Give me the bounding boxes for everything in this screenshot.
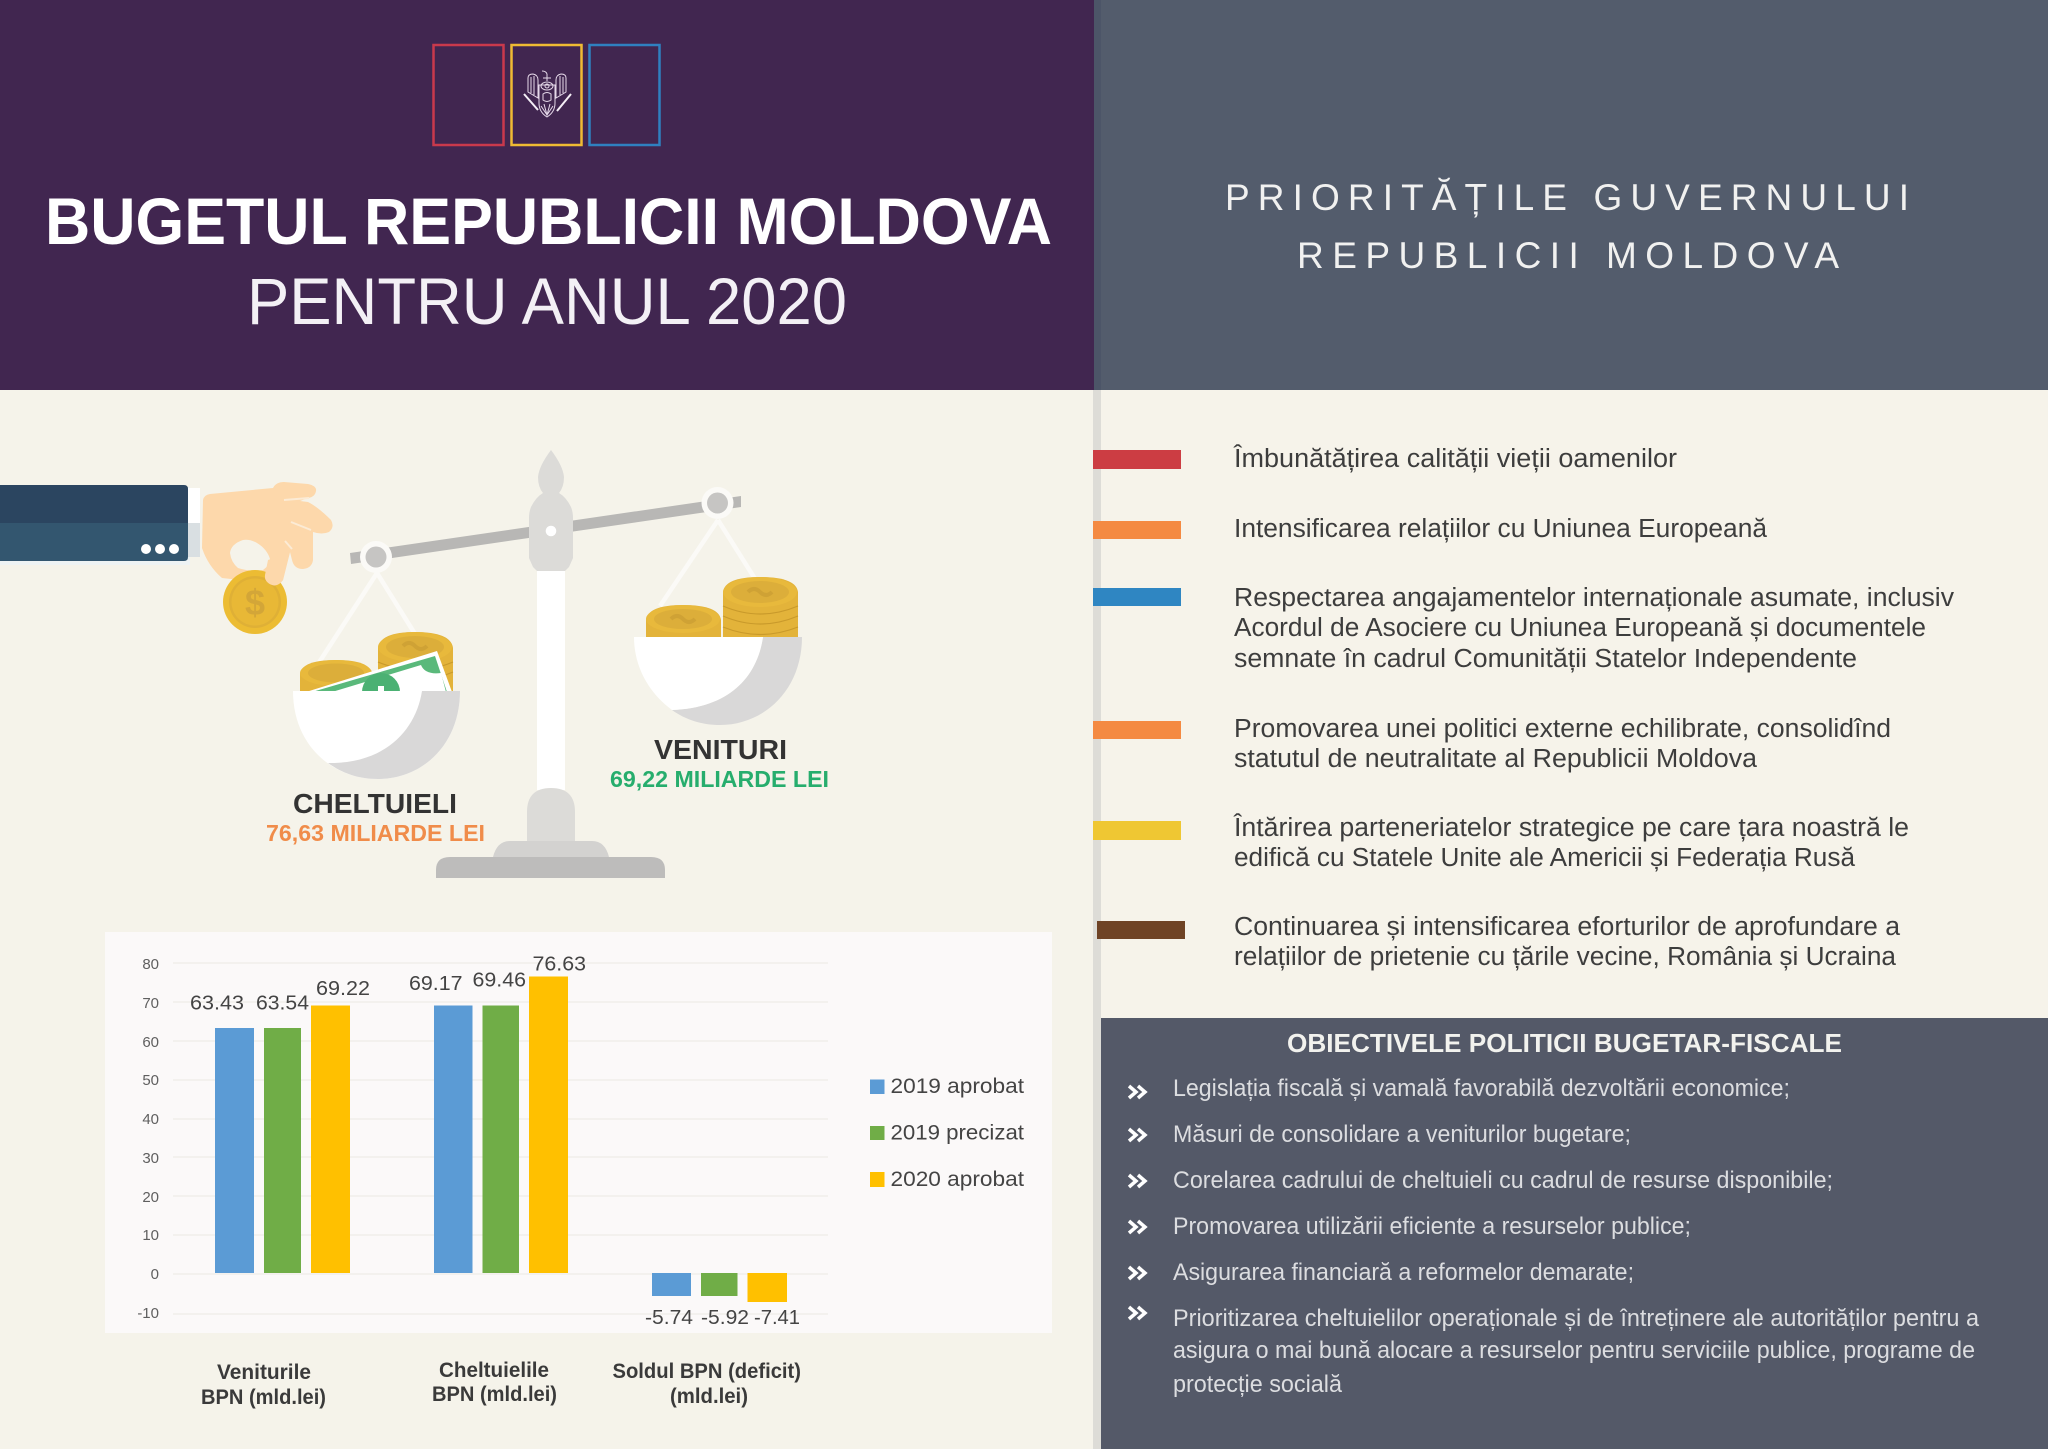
bar chart: budget — [105, 932, 1052, 1333]
priority 2: Intensificarea relațiilor cu Uniunea Europeană — [1234, 515, 1768, 543]
icon: bullet chevrons — [1129, 1086, 1145, 1319]
label: expenses: 76,63 MILIARDE LEI — [266, 820, 485, 846]
heading: government priorities: PRIORITĂȚILE GUVERNULUI — [1225, 177, 1909, 218]
chart value labels: -7.41 — [754, 1307, 800, 1329]
chart category labels: Cheltuielile — [439, 1359, 549, 1382]
heading: main title: BUGETUL REPUBLICII MOLDOVA — [45, 184, 1052, 258]
objectives list: Măsuri de consolidare a veniturilor bugetare; — [1173, 1121, 1631, 1148]
chart category labels: BPN (mld.lei) — [201, 1386, 326, 1409]
chart category labels — [201, 1359, 801, 1409]
chart axis labels — [137, 956, 159, 1322]
priority 5 — [1093, 813, 1909, 872]
objectives list: asigura o mai bună alocare a resurselor pentru serviciile publice, programe de — [1173, 1337, 1975, 1364]
chart legend: 2019 precizat — [890, 1122, 1024, 1144]
icon: tricolor frames with coat of arms — [434, 45, 660, 145]
label: expenses — [266, 788, 485, 846]
chart value labels: 63.54 — [256, 992, 309, 1014]
chart axis labels: 0 — [151, 1266, 159, 1283]
illustration: hand dropping a coin — [0, 482, 333, 634]
heading: government priorities — [1225, 177, 1909, 276]
objectives list: Asigurarea financiară a reformelor demarate; — [1173, 1259, 1634, 1286]
panel: priorities header — [1094, 0, 2048, 390]
label: expenses: CHELTUIELI — [293, 788, 457, 819]
chart axis labels: 80 — [142, 956, 159, 973]
chart category labels: Veniturile — [217, 1361, 311, 1384]
priority 3: semnate în cadrul Comunității Statelor Independente — [1234, 645, 1857, 673]
objectives list: Legislația fiscală și vamală favorabilă dezvoltării economice; — [1173, 1075, 1790, 1102]
chart category labels: BPN (mld.lei) — [432, 1383, 557, 1406]
label: revenues: VENITURI — [654, 734, 787, 765]
chart axis labels: 30 — [142, 1150, 159, 1167]
chart legend — [870, 1075, 1024, 1191]
priority 4: Promovarea unei politici externe echilibrate, consolidînd — [1234, 715, 1891, 743]
scale pole — [436, 450, 665, 878]
chart axis labels: 10 — [142, 1227, 159, 1244]
chart value labels: 69.46 — [472, 970, 526, 992]
objectives list: Promovarea utilizării eficiente a resurselor publice; — [1173, 1213, 1691, 1240]
chart axis labels: 60 — [142, 1034, 159, 1051]
priority 3: Acordul de Asociere cu Uniunea Europeană și documentele — [1234, 614, 1926, 642]
bars: 2020 approved — [311, 976, 787, 1302]
chart value labels: 76.63 — [532, 954, 586, 976]
chart axis labels: 50 — [142, 1072, 159, 1089]
panel: priorities list — [1093, 444, 1954, 971]
chart legend: 2019 aprobat — [890, 1075, 1024, 1098]
chart value labels — [190, 954, 800, 1329]
chart value labels: 69.17 — [409, 973, 462, 995]
panel: fiscal policy objectives — [1101, 1018, 2048, 1449]
priority 5: Întărirea parteneriatelor strategice pe care țara noastră le — [1233, 813, 1909, 842]
chart axis labels: 20 — [142, 1189, 159, 1206]
heading: government priorities: REPUBLICII MOLDOVA — [1297, 235, 1839, 276]
priority 1 — [1093, 444, 1678, 473]
chart axis labels: 70 — [142, 995, 159, 1012]
icon: coin — [223, 570, 287, 634]
right pan with coins — [634, 487, 802, 725]
bars: 2019 revised — [264, 1006, 738, 1296]
chart value labels: 69.22 — [316, 978, 370, 1000]
chart value labels: 63.43 — [190, 992, 244, 1014]
heading: objectives: OBIECTIVELE POLITICII BUGETAR-FISCALE — [1287, 1028, 1842, 1058]
chart category labels: Soldul BPN (deficit) — [612, 1360, 801, 1383]
heading: subtitle: PENTRU ANUL 2020 — [247, 264, 847, 338]
objectives list: protecție socială — [1173, 1371, 1343, 1398]
chart category labels: (mld.lei) — [670, 1385, 748, 1408]
objectives list: Corelarea cadrului de cheltuieli cu cadrul de resurse disponibile; — [1173, 1167, 1833, 1194]
left pan with coins and banknote — [293, 541, 460, 779]
chart axis labels: 40 — [142, 1111, 159, 1128]
bars: 2019 approved — [215, 1006, 691, 1296]
objectives list: Prioritizarea cheltuielilor operaționale și de întreținere ale autorităților pentru a — [1173, 1305, 1980, 1332]
icon: coin: $ — [245, 582, 265, 623]
objectives list — [1173, 1075, 1980, 1398]
priority 6: relațiilor de prietenie cu țările vecine, România și Ucraina — [1234, 943, 1897, 971]
label: revenues — [610, 734, 829, 792]
chart legend: 2020 aprobat — [890, 1168, 1024, 1191]
scale beam — [350, 496, 741, 564]
illustration: balance scale — [293, 450, 802, 878]
chart value labels: -5.74 — [645, 1307, 693, 1329]
priority 6 — [1097, 913, 1901, 971]
chart value labels: -5.92 — [701, 1307, 749, 1329]
priority 3: Respectarea angajamentelor internaționale asumate, inclusiv — [1234, 584, 1954, 612]
label: revenues: 69,22 MILIARDE LEI — [610, 766, 829, 792]
priority 6: Continuarea și intensificarea eforturilor de aprofundare a — [1234, 913, 1901, 941]
panel: header title — [0, 0, 1094, 390]
priority 5: edifică cu Statele Unite ale Americii și Federația Rusă — [1234, 844, 1856, 872]
priority 3 — [1093, 584, 1954, 673]
chart axis labels: -10 — [137, 1305, 159, 1322]
priority 1: Îmbunătățirea calității vieții oamenilor — [1233, 444, 1678, 473]
priority 4 — [1093, 715, 1891, 773]
priority 4: statutul de neutralitate al Republicii Moldova — [1234, 745, 1758, 773]
